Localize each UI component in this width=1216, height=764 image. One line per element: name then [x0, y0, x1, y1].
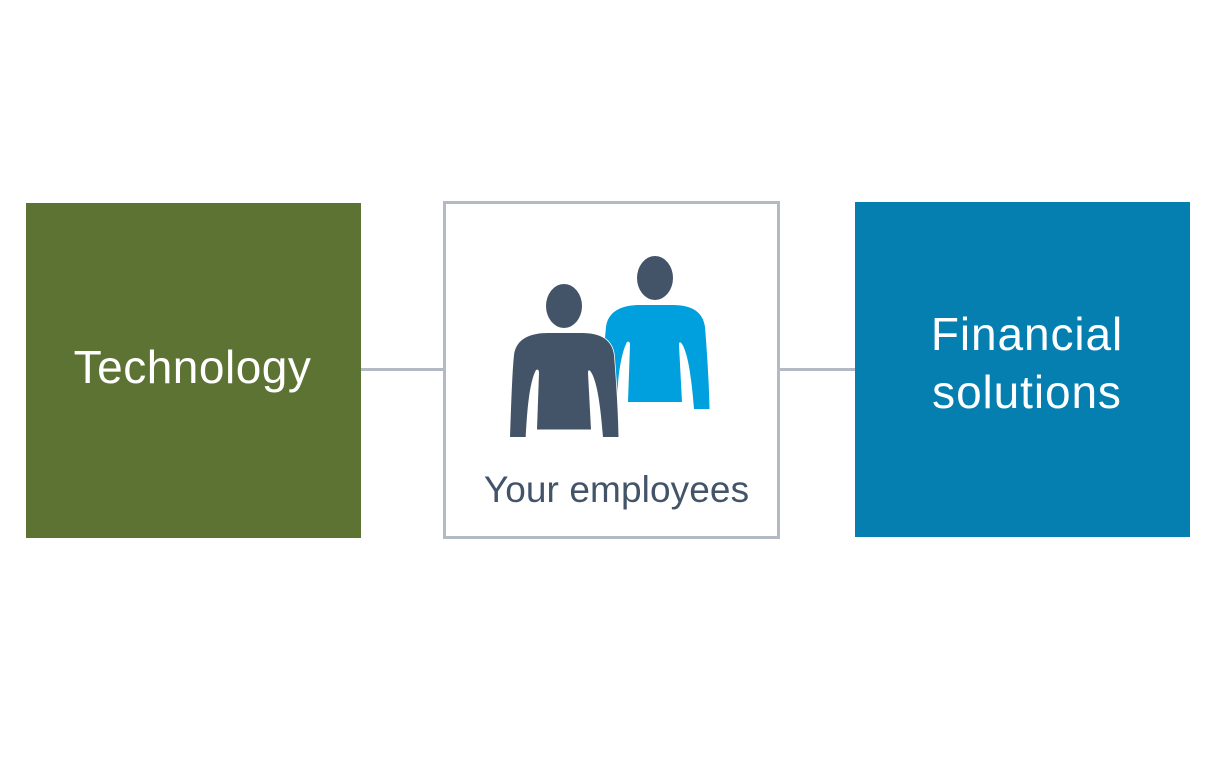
connector: technology to employees — [361, 368, 443, 371]
label: your employees: Your employees — [484, 469, 749, 510]
panel: your employees — [443, 201, 780, 539]
panel: financial solutions — [855, 202, 1190, 537]
panel: technology — [26, 203, 361, 538]
icon: two employees — [510, 256, 710, 437]
label: financial solutions: Financial — [931, 308, 1123, 360]
icon: front person — [510, 284, 618, 437]
icon: back person — [601, 256, 710, 409]
label: financial solutions — [931, 308, 1123, 418]
label: financial solutions: solutions — [932, 366, 1122, 418]
connector: employees to financial solutions — [779, 368, 855, 371]
label: technology: Technology — [74, 341, 311, 393]
